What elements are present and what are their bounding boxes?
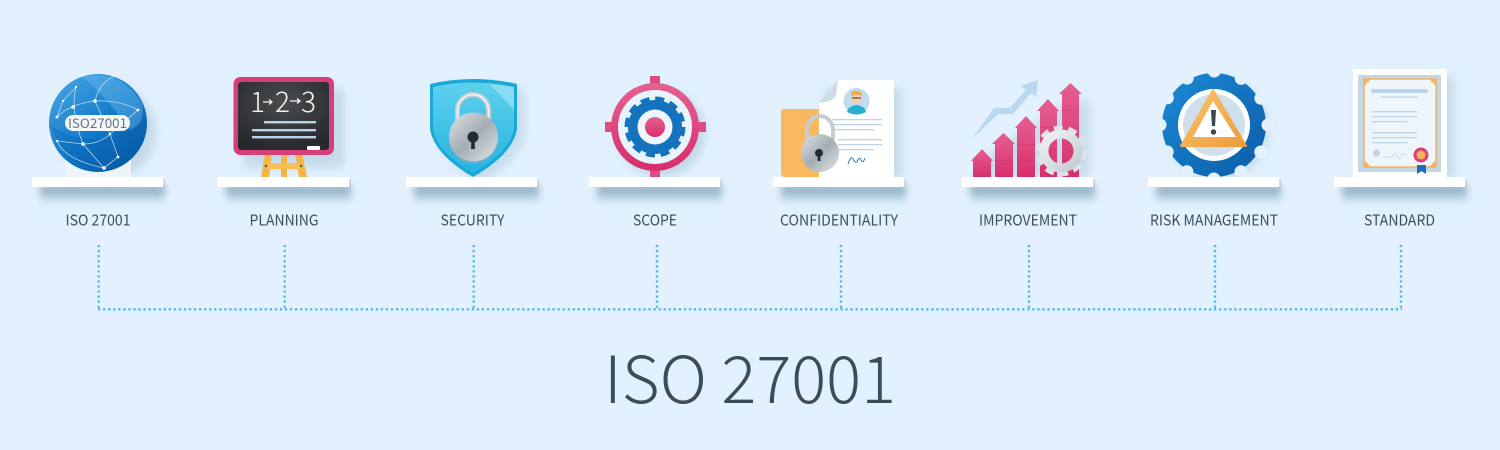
item: risk management xyxy=(1148,71,1281,230)
icon: shield with padlock xyxy=(430,79,525,184)
icon: gear with warning triangle xyxy=(1160,71,1269,180)
item: improvement xyxy=(962,80,1095,230)
icon: globe: ISO27001 xyxy=(68,113,127,132)
item: confidentiality xyxy=(773,80,906,230)
avatar xyxy=(844,88,870,114)
icon: framed certificate xyxy=(1353,69,1454,182)
icon: folder, document and padlock xyxy=(781,80,902,180)
shelf xyxy=(1148,177,1281,206)
chalk numbers: 1 xyxy=(250,81,265,121)
label: CONFIDENTIALITY xyxy=(780,210,898,230)
shelf xyxy=(1334,177,1467,206)
shelf xyxy=(589,177,722,206)
shelf xyxy=(773,177,906,206)
shelf xyxy=(406,177,539,206)
label: PLANNING xyxy=(250,210,318,230)
label: STANDARD xyxy=(1364,210,1435,230)
title: ISO 27001 xyxy=(604,328,896,422)
item: standard xyxy=(1334,69,1467,230)
label: SCOPE xyxy=(633,210,677,230)
item: ISO 27001 xyxy=(32,74,165,230)
chalk numbers xyxy=(250,81,316,121)
label: ISO 27001 xyxy=(66,210,130,230)
item: scope xyxy=(589,76,722,230)
label: IMPROVEMENT xyxy=(979,210,1077,230)
light trend arrow xyxy=(972,80,1038,139)
label: SECURITY xyxy=(440,210,505,230)
shelf xyxy=(218,177,351,206)
shelf xyxy=(32,177,165,206)
shelf xyxy=(962,177,1095,206)
icon: target with gear xyxy=(605,76,706,177)
small gear xyxy=(1038,128,1084,174)
icon: growth arrows and gear xyxy=(971,80,1090,178)
item: planning xyxy=(218,77,351,230)
icon: chalkboard on easel xyxy=(234,77,344,177)
label: RISK MANAGEMENT xyxy=(1150,210,1278,230)
icon: globe xyxy=(49,74,156,180)
item: security xyxy=(406,79,539,230)
dotted connector xyxy=(98,245,1402,309)
chalk numbers: 2 xyxy=(275,81,290,121)
chalk numbers: 3 xyxy=(301,81,316,121)
